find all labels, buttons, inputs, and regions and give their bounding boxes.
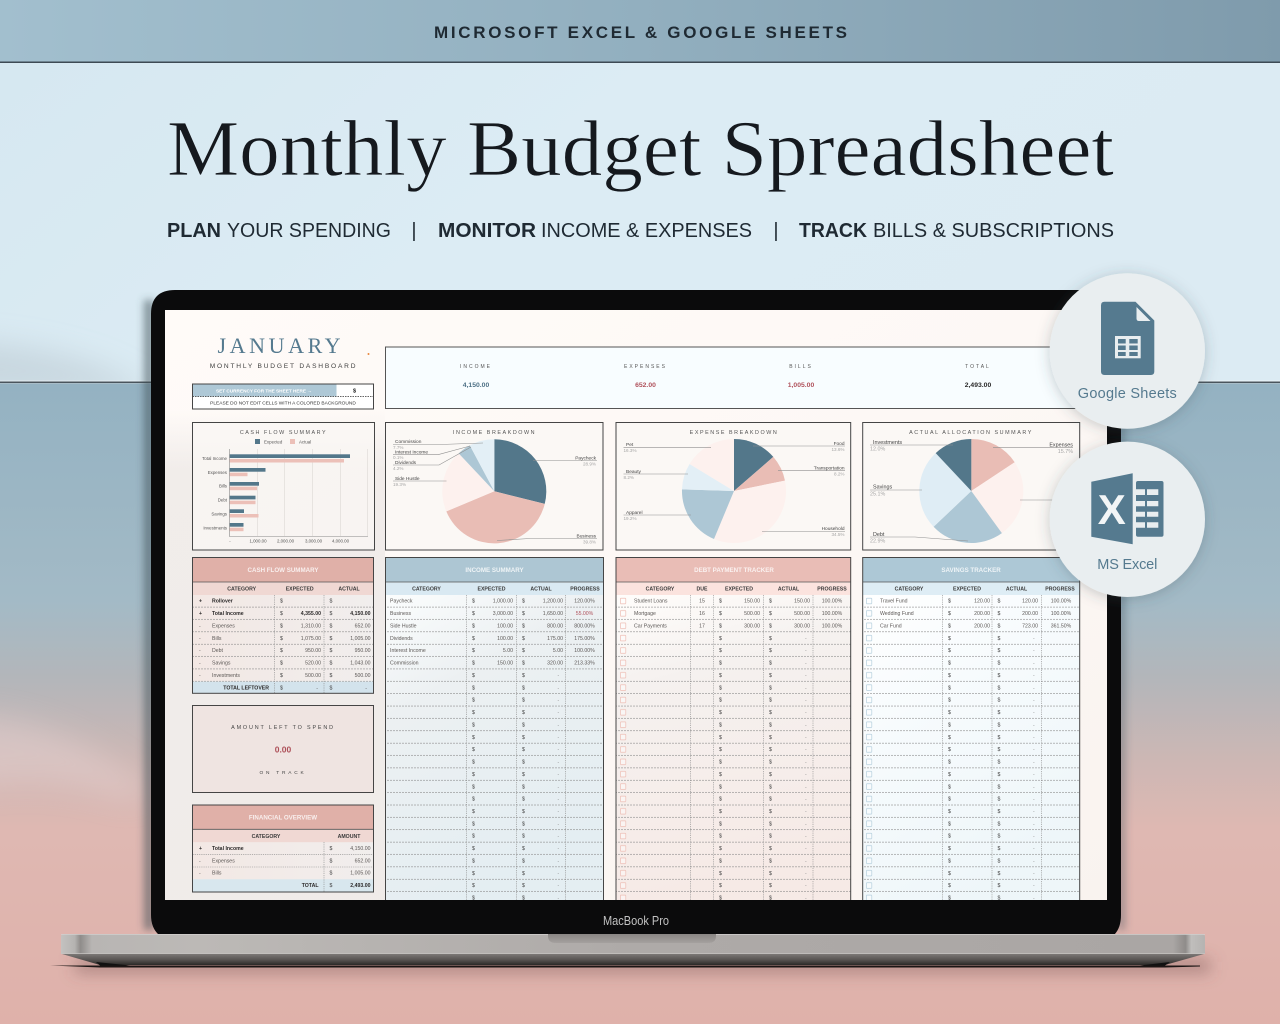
table: cash flow summary: $ [330, 673, 332, 679]
pie chart: actual allocation summary: Debt [873, 532, 885, 538]
table: savings tracker: 120.00 [1022, 599, 1038, 605]
table: debt payment tracker: 150.00 [794, 599, 810, 605]
subtitle features: TRACK [799, 220, 868, 242]
table: cash flow summary: $ [330, 623, 332, 629]
table: income summary: 175.00% [574, 636, 595, 642]
table: cash flow summary: - [316, 685, 318, 691]
table: debt payment tracker: $ [769, 623, 772, 629]
table: financial overview: 1,005.00 [350, 871, 371, 877]
table: debt payment tracker: ACTUAL [778, 586, 800, 592]
table: financial overview: + [199, 846, 202, 852]
table: cash flow summary: 520.00 [305, 661, 321, 667]
pie chart: actual allocation summary: 15.7% [1058, 449, 1073, 455]
table: cash flow summary: CASH FLOW SUMMARY [248, 567, 319, 574]
table: income summary: $$$$$$$$$$$$$$$$$$$ [472, 673, 475, 902]
table: income summary: 1,650.00 [543, 611, 563, 617]
table: debt payment tracker: 500.00 [794, 611, 810, 617]
pie chart: actual allocation summary: 12.0% [870, 446, 885, 452]
table: savings tracker: $ [998, 623, 1000, 629]
table: income summary: 3,000.00 [493, 611, 513, 617]
table: debt payment tracker: CATEGORY [646, 586, 675, 592]
table: savings tracker: 200.00 [974, 611, 990, 617]
subtitle features: BILLS & SUBSCRIPTIONS [873, 220, 1114, 242]
table: cash flow summary: $ [280, 685, 283, 691]
bar chart: cash flow summary: Expenses [208, 470, 228, 475]
subtitle features: PLAN [167, 220, 221, 242]
table: income summary: $ [522, 611, 525, 617]
subtitle features: YOUR SPENDING [227, 220, 391, 242]
table: cash flow summary: Debt [212, 648, 224, 654]
bar chart: cash flow summary: 1,000.00 [249, 538, 267, 544]
table: cash flow summary: $ [330, 599, 332, 605]
table: debt payment tracker: $ [719, 611, 722, 617]
pie chart: income breakdown: Interest Income [395, 450, 428, 456]
subtitle features: INCOME & EXPENSES [541, 220, 752, 242]
table: income summary: 55.00% [576, 611, 594, 617]
table: savings tracker: 120.00 [974, 599, 990, 605]
table: cash flow summary: Total Income [212, 611, 244, 617]
pie chart: expense breakdown: 8.2% [834, 472, 844, 476]
currency box: PLEASE DO NOT EDIT CELLS WITH A COLORED BACKGROUND [210, 401, 356, 407]
pie chart: income breakdown: 4.2% [393, 466, 403, 471]
month heading: MONTHLY BUDGET DASHBOARD [210, 363, 357, 370]
table: financial overview: $ [330, 883, 332, 889]
table: savings tracker: PROGRESS [1045, 586, 1075, 592]
table: savings tracker: $ [948, 623, 951, 629]
pie chart: income breakdown: Dividends [395, 460, 417, 466]
table: debt payment tracker: EXPECTED [725, 586, 753, 592]
table: cash flow summary: + [199, 611, 202, 617]
table: income summary: $$$$$$$$$$$$$$$$$$$ [522, 673, 525, 902]
table: cash flow summary: $ [280, 623, 283, 629]
table: debt payment tracker: 300.00 [794, 623, 810, 629]
table: income summary: 5.00 [553, 648, 563, 654]
table: financial overview: Bills [212, 871, 222, 877]
table: savings tracker: ACTUAL [1006, 586, 1028, 592]
table: financial overview: - [199, 858, 201, 864]
pie chart: actual allocation summary: 22.9% [870, 538, 885, 544]
pie chart: income breakdown: 19.3% [393, 482, 406, 487]
pie chart: actual allocation summary: Expenses [1049, 442, 1073, 448]
bar chart: cash flow summary: Total Income [202, 456, 228, 461]
currency box: SET CURRENCY FOR THE SHEET HERE → [216, 388, 312, 393]
table: debt payment tracker: Student Loans [634, 599, 668, 605]
table: cash flow summary: Savings [212, 661, 231, 667]
table: cash flow summary: TOTAL LEFTOVER [223, 685, 269, 691]
bar chart: cash flow summary: Expected [264, 440, 283, 444]
table: income summary: $ [472, 623, 475, 629]
KPI summary panel: INCOME [460, 364, 492, 370]
table: cash flow summary: $ [330, 611, 332, 617]
pie chart: income breakdown: Paycheck [575, 456, 597, 462]
table: debt payment tracker: Car Payments [634, 623, 667, 629]
subtitle features: | [773, 220, 779, 242]
table: income summary: Interest Income [390, 648, 426, 654]
table: financial overview: 4,150.00 [350, 846, 371, 852]
table: income summary: 213.33% [574, 661, 595, 667]
pie chart: expense breakdown: Apparel [626, 510, 643, 516]
table: income summary: 120.00% [574, 599, 595, 605]
table: income summary: $ [472, 611, 475, 617]
pie chart: income breakdown: Commission [395, 439, 422, 445]
title: Monthly Budget Spreadsheet [167, 106, 1114, 193]
bar chart: cash flow summary: 2,000.00 [277, 538, 295, 544]
pie chart: income breakdown: 0.1% [393, 455, 403, 460]
table: savings tracker: 723.00 [1022, 623, 1038, 629]
bar chart: cash flow summary: Investments [203, 525, 228, 530]
bar chart: cash flow summary: 3,000.00 [305, 538, 323, 544]
table: financial overview [192, 805, 374, 892]
table: debt payment tracker: 100.00% [822, 623, 843, 629]
table: income summary: 100.00% [574, 648, 595, 654]
table: income summary: PROGRESS [570, 586, 600, 592]
pie chart: income breakdown: Side Hustle [395, 476, 420, 482]
table: income summary: Business [390, 611, 411, 617]
subtitle features: | [411, 220, 417, 242]
table: income summary: $ [472, 636, 475, 642]
KPI summary panel: TOTAL [965, 364, 991, 370]
currency box [192, 384, 374, 409]
laptop [50, 290, 1210, 972]
icon: Google Sheets document [1101, 302, 1154, 375]
table: cash flow summary: - [199, 648, 201, 654]
badge: MS Excel: MS Excel [1097, 557, 1157, 573]
table: savings tracker: 200.00 [974, 623, 990, 629]
table: income summary: 1,200.00 [543, 599, 563, 605]
table: income summary: Commission [390, 661, 419, 667]
table: cash flow summary: 4,150.00 [350, 611, 371, 617]
table: savings tracker: $ [998, 599, 1000, 605]
subtitle features [167, 220, 1114, 242]
pie chart: expense breakdown: 13.6% [831, 447, 844, 452]
bar chart: cash flow summary: 4,000.00 [332, 538, 350, 544]
pie chart: expense breakdown: EXPENSE BREAKDOWN [690, 430, 778, 436]
table: financial overview: FINANCIAL OVERVIEW [249, 814, 317, 822]
table: cash flow summary: $ [280, 599, 283, 605]
bar chart: cash flow summary: - [229, 538, 231, 544]
month heading [210, 338, 370, 368]
pie chart: expense breakdown: 34.5% [831, 532, 844, 537]
table: debt payment tracker: $ [719, 599, 722, 605]
table: cash flow summary: $ [330, 685, 332, 691]
table: income summary: 175.00 [547, 636, 563, 642]
table: financial overview: Total Income [212, 846, 244, 852]
table: cash flow summary [192, 558, 374, 693]
table: cash flow summary: - [199, 661, 201, 667]
table: debt payment tracker: 17 [699, 623, 705, 629]
table: savings tracker [863, 558, 1080, 908]
table: income summary: ACTUAL [530, 586, 552, 592]
table: debt payment tracker: $$$$$$$$$$$$$$$$$$$$$$ [719, 636, 722, 902]
table: cash flow summary: - [199, 636, 201, 642]
table: income summary: CATEGORY [412, 586, 441, 592]
subtitle features: MONITOR [438, 220, 537, 242]
table: income summary: Paycheck [390, 599, 413, 605]
table: income summary: 5.00 [503, 648, 513, 654]
table: cash flow summary: 1,043.00 [350, 661, 371, 667]
table: cash flow summary: 950.00 [355, 648, 371, 654]
table: cash flow summary: ACTUAL [338, 586, 360, 592]
bar chart: cash flow summary: Bills [219, 484, 228, 489]
KPI summary panel: 1,005.00 [788, 382, 814, 389]
table: cash flow summary: CATEGORY [227, 586, 257, 592]
top banner text: MICROSOFT EXCEL & GOOGLE SHEETS [434, 23, 847, 42]
pie chart: income breakdown: INCOME BREAKDOWN [453, 430, 536, 436]
bar chart: cash flow summary: Actual [299, 440, 311, 444]
bar chart: cash flow summary: Savings [211, 511, 228, 516]
table: financial overview: CATEGORY [252, 834, 281, 840]
pie chart: expense breakdown: Household [822, 526, 845, 532]
table: cash flow summary: $ [330, 636, 332, 642]
table: income summary: $ [522, 648, 525, 654]
table: cash flow summary: $ [280, 611, 283, 617]
table: cash flow summary: $ [280, 636, 283, 642]
table: debt payment tracker: DEBT PAYMENT TRACKER [694, 567, 774, 574]
table: cash flow summary: 500.00 [305, 673, 321, 679]
table: cash flow summary: Rollover [212, 599, 233, 605]
table: cash flow summary: 1,005.00 [350, 636, 371, 642]
table: cash flow summary: Expenses [212, 623, 235, 629]
table: financial overview: $ [330, 871, 332, 877]
table: savings tracker: SAVINGS TRACKER [941, 567, 1001, 574]
table: savings tracker: $$$$$$$$$$$$$$$$$$$$$$ [948, 636, 951, 902]
table: savings tracker: ---------------------- [1033, 636, 1035, 902]
laptop brand label: MacBook Pro [603, 914, 669, 928]
table: debt payment tracker: 100.00% [822, 599, 843, 605]
table: debt payment tracker: $ [719, 623, 722, 629]
table: cash flow summary: 652.00 [355, 623, 371, 629]
table: savings tracker: $$$$$$$$$$$$$$$$$$$$$$ [998, 636, 1000, 902]
table: income summary: $ [522, 599, 525, 605]
KPI summary panel [386, 347, 1080, 408]
badge: MS Excel [1050, 442, 1205, 597]
KPI summary panel: BILLS [789, 364, 813, 370]
table: income summary: $ [472, 661, 475, 667]
bar chart: cash flow summary: Debt [218, 497, 228, 502]
table: income summary: Dividends [390, 636, 413, 642]
pie chart: income breakdown: 7.7% [393, 445, 403, 450]
table: debt payment tracker: 300.00 [744, 623, 760, 629]
table: savings tracker: EXPECTED [953, 586, 981, 592]
table: cash flow summary: $ [330, 648, 332, 654]
table: income summary: 1,000.00 [493, 599, 513, 605]
table: income summary: $ [522, 623, 525, 629]
table: cash flow summary: 4,355.00 [301, 611, 321, 617]
table: savings tracker: $ [998, 611, 1000, 617]
table: financial overview: 2,493.00 [350, 883, 371, 889]
table: cash flow summary: Investments [212, 673, 240, 679]
pie chart: expense breakdown: 19.2% [624, 516, 637, 521]
table: income summary: $ [472, 648, 475, 654]
table: savings tracker: $ [948, 611, 951, 617]
table: cash flow summary: 500.00 [355, 673, 371, 679]
table: income summary: INCOME SUMMARY [465, 567, 524, 574]
table: debt payment tracker: 150.00 [744, 599, 760, 605]
pie chart: income breakdown: 28.9% [583, 462, 596, 466]
table: cash flow summary: $ [280, 661, 283, 667]
pie chart: expense breakdown: Pet [626, 442, 634, 448]
table: financial overview: TOTAL [302, 883, 319, 889]
KPI summary panel: 2,493.00 [965, 382, 991, 389]
table: income summary: $ [522, 661, 525, 667]
table: income summary: 100.00 [497, 636, 513, 642]
table: financial overview: - [199, 871, 201, 877]
pie chart: actual allocation summary: 25.1% [870, 492, 885, 498]
table: savings tracker: $ [948, 599, 951, 605]
badge: Google Sheets: Google Sheets [1078, 386, 1177, 402]
table: cash flow summary: - [199, 673, 201, 679]
trackpad notch [548, 934, 716, 943]
table: debt payment tracker: $$$$$$$$$$$$$$$$$$$$$$ [769, 636, 772, 902]
screen [165, 310, 1107, 908]
table: debt payment tracker [616, 558, 851, 908]
table: cash flow summary: - [365, 685, 367, 691]
bar chart: cash flow summary: CASH FLOW SUMMARY [240, 430, 327, 436]
table: income summary: $ [472, 599, 475, 605]
callout: amount left to spend: ON TRACK [259, 770, 307, 776]
table: cash flow summary: - [199, 623, 201, 629]
month heading: JANUARY [217, 333, 344, 358]
table: cash flow summary: 1,310.00 [301, 623, 321, 629]
table: debt payment tracker: 16 [699, 611, 705, 617]
laptop lid [151, 290, 1121, 935]
table: debt payment tracker: 500.00 [744, 611, 760, 617]
callout: amount left to spend: AMOUNT LEFT TO SPEND [231, 725, 335, 731]
pie chart: income breakdown [386, 422, 603, 550]
table: financial overview: Expenses [212, 858, 235, 864]
table: debt payment tracker: DUE [697, 586, 708, 592]
pie chart: income breakdown: Business [577, 534, 597, 540]
table: income summary: EXPECTED [478, 586, 506, 592]
pie chart: expense breakdown: 16.3% [624, 448, 637, 453]
table: debt payment tracker: Mortgage [634, 611, 656, 617]
table: debt payment tracker: $ [769, 611, 772, 617]
bar chart: cash flow summary [192, 422, 374, 550]
table: savings tracker: Travel Fund [880, 599, 908, 605]
callout: amount left to spend [192, 706, 374, 792]
table: savings tracker: 100.00% [1051, 611, 1072, 617]
pie chart: expense breakdown [616, 422, 851, 550]
laptop base [50, 934, 1205, 968]
table: financial overview: 652.00 [355, 858, 371, 864]
currency box: $ [353, 388, 356, 394]
table: income summary: 100.00 [497, 623, 513, 629]
KPI summary panel: EXPENSES [624, 364, 667, 370]
pie chart: income breakdown: 39.8% [583, 540, 596, 544]
pie chart: actual allocation summary: ACTUAL ALLOCATION SUMMARY [909, 430, 1033, 436]
badge: Google Sheets [1050, 273, 1205, 429]
table: cash flow summary: $ [280, 648, 283, 654]
table: savings tracker: 200.00 [1022, 611, 1038, 617]
table: financial overview: $ [330, 846, 332, 852]
table: cash flow summary: Bills [212, 636, 222, 642]
callout: amount left to spend: 0.00 [275, 744, 292, 754]
table: income summary: 320.00 [547, 661, 563, 667]
table: debt payment tracker: 100.00% [822, 611, 843, 617]
table: income summary: Side Hustle [390, 623, 417, 629]
pie chart: actual allocation summary [863, 422, 1080, 550]
table: cash flow summary: $ [280, 673, 283, 679]
table: savings tracker: Car Fund [880, 623, 902, 629]
table: cash flow summary: + [199, 599, 202, 605]
table: financial overview: $ [330, 858, 332, 864]
table: savings tracker: Wedding Fund [880, 611, 914, 617]
table: savings tracker: 361.50% [1051, 623, 1072, 629]
pie chart: actual allocation summary: Investments [873, 440, 902, 446]
table: income summary: $ [522, 636, 525, 642]
table: cash flow summary: 950.00 [305, 648, 321, 654]
table: debt payment tracker: ---------------------- [805, 636, 807, 902]
table: debt payment tracker: $ [769, 599, 772, 605]
table: cash flow summary: EXPECTED [286, 586, 314, 592]
table: income summary: 800.00 [547, 623, 563, 629]
table: cash flow summary: $ [330, 661, 332, 667]
table: debt payment tracker: PROGRESS [817, 586, 847, 592]
table: savings tracker: 100.00% [1051, 599, 1072, 605]
pie chart: expense breakdown: Food [834, 441, 845, 447]
table: income summary: 150.00 [497, 661, 513, 667]
icon: Excel document [1091, 473, 1164, 544]
pie chart: expense breakdown: Beauty [626, 469, 642, 475]
pie chart: expense breakdown: 8.2% [624, 475, 634, 480]
table: financial overview: AMOUNT [338, 834, 361, 840]
table: income summary [386, 558, 604, 908]
table: income summary: 800.00% [574, 623, 595, 629]
table: debt payment tracker: 15 [699, 599, 705, 605]
table: income summary: ------------------- [558, 673, 560, 902]
icon: Excel document: X [1098, 486, 1126, 533]
pie chart: actual allocation summary: Savings [873, 484, 892, 490]
KPI summary panel: 4,150.00 [463, 382, 489, 389]
table: savings tracker: CATEGORY [895, 586, 924, 592]
table: cash flow summary: 1,075.00 [301, 636, 321, 642]
KPI summary panel: 652.00 [635, 382, 656, 389]
pie chart: expense breakdown: Transportation [814, 466, 845, 472]
